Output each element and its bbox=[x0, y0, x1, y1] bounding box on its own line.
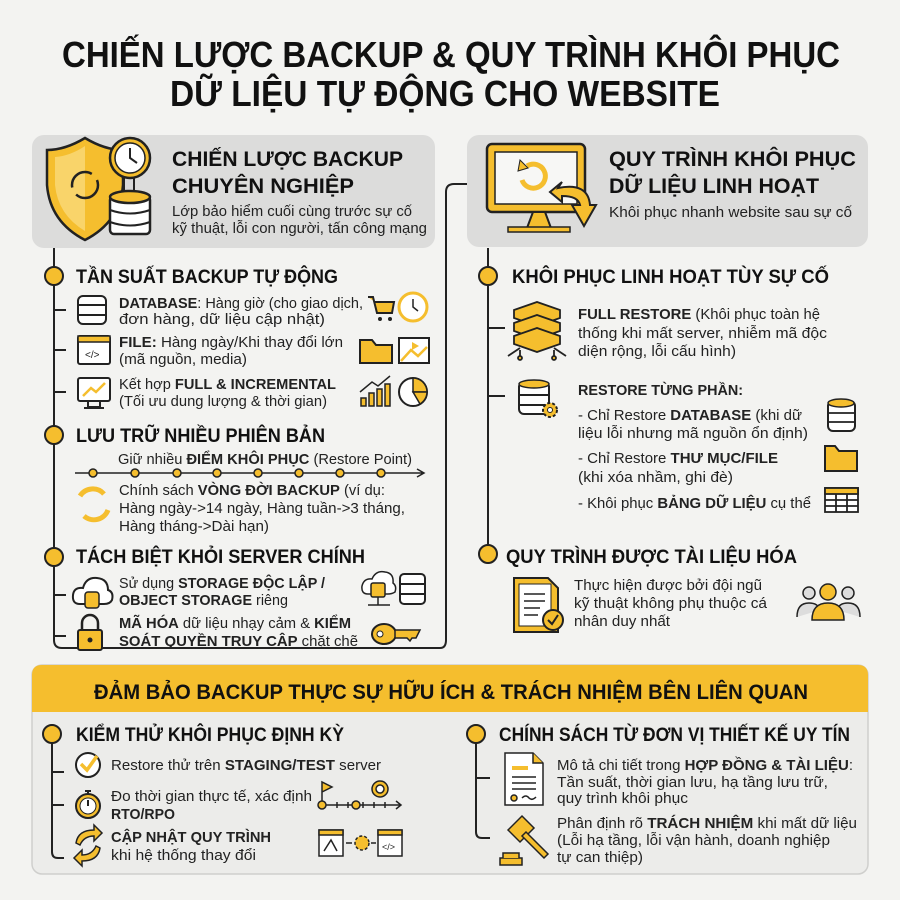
icon: bar chart bbox=[360, 376, 390, 406]
left column: kiểm thử: Restore thử trên STAGING/TEST server bbox=[111, 757, 381, 774]
icon: database bbox=[400, 574, 425, 604]
section: khôi phục linh hoạt: - Chỉ Restore DATABASE (khi dữ bbox=[578, 407, 802, 424]
left column: kiểm thử bbox=[43, 724, 402, 866]
right column: chính sách: Phân định rõ TRÁCH NHIỆM khi mất dữ liệu bbox=[557, 814, 857, 832]
section: tần suất backup: TẦN SUẤT BACKUP TỰ ĐỘNG bbox=[76, 266, 338, 288]
heading: chiến lược backup bbox=[172, 148, 403, 198]
section: tách biệt khỏi server bbox=[45, 546, 425, 650]
section: lưu trữ nhiều phiên bản: LƯU TRỮ NHIỀU PHIÊN BẢN bbox=[76, 425, 325, 447]
timeline: restore points bbox=[75, 469, 424, 477]
section: khôi phục linh hoạt: (khi xóa nhầm, ghi đè) bbox=[578, 469, 733, 486]
left column: kiểm thử: Đo thời gian thực tế, xác định bbox=[111, 788, 312, 805]
section: tách biệt khỏi server: TÁCH BIỆT KHỎI SERVER CHÍNH bbox=[76, 546, 365, 568]
title: DỮ LIỆU TỰ ĐỘNG CHO WEBSITE bbox=[170, 72, 720, 114]
section: lưu trữ nhiều phiên bản: Chính sách VÒNG ĐỜI BACKUP (ví dụ: bbox=[119, 481, 385, 499]
heading: quy trình khôi phục: QUY TRÌNH KHÔI PHỤC bbox=[609, 147, 856, 171]
section: tần suất backup: FILE: Hàng ngày/Khi thay đổi lớn bbox=[119, 334, 343, 351]
right column: chính sách bbox=[467, 724, 857, 866]
section: quy trình được tài liệu hóa: Thực hiện được bởi đội ngũ bbox=[574, 577, 762, 594]
left column: kiểm thử: CẬP NHẬT QUY TRÌNH bbox=[111, 828, 271, 846]
icon: gavel bbox=[500, 816, 548, 865]
icon: lifecycle arrows bbox=[80, 489, 108, 520]
left column: kiểm thử: khi hệ thống thay đổi bbox=[111, 847, 256, 864]
heading: quy trình khôi phục bbox=[609, 147, 856, 198]
icon: timeline flag target bbox=[318, 781, 401, 809]
icon: monitor restore bbox=[487, 144, 596, 232]
section: tần suất backup: (mã nguồn, media) bbox=[119, 351, 247, 368]
icon: process flow bbox=[319, 830, 402, 856]
section: lưu trữ nhiều phiên bản: Giữ nhiều ĐIỂM KHÔI PHỤC (Restore Point) bbox=[118, 450, 412, 468]
icon: database gear bbox=[519, 380, 557, 417]
right column: chính sách: Tần suất, thời gian lưu, hạ tầng lưu trữ, bbox=[557, 774, 828, 791]
right column: chính sách: tự can thiệp) bbox=[557, 849, 643, 866]
icon: folder bbox=[825, 446, 857, 471]
section: lưu trữ nhiều phiên bản: Hàng tháng->Dài hạn) bbox=[119, 518, 269, 535]
icon: database small bbox=[828, 399, 855, 431]
icon: cloud network bbox=[362, 572, 396, 605]
right column: chính sách: (Lỗi hạ tầng, lỗi vận hành, doanh nghiệp bbox=[557, 832, 830, 849]
icon: key bbox=[372, 624, 420, 644]
section: khôi phục linh hoạt: FULL RESTORE (Khôi phục toàn hệ bbox=[578, 306, 820, 323]
icon: database bbox=[78, 296, 106, 324]
right column: chính sách: CHÍNH SÁCH TỪ ĐƠN VỊ THIẾT KẾ UY TÍN bbox=[499, 724, 850, 746]
icon: clock bbox=[399, 293, 427, 321]
icon: document check bbox=[514, 578, 563, 632]
heading: quy trình khôi phục: DỮ LIỆU LINH HOẠT bbox=[609, 174, 819, 198]
section: khôi phục linh hoạt: - Khôi phục BẢNG DỮ LIỆU cụ thể bbox=[578, 494, 811, 512]
icon: update arrows bbox=[74, 825, 102, 866]
icon: code window: </> bbox=[85, 350, 100, 361]
subtitle: Khôi phục nhanh website sau sự cố bbox=[609, 204, 853, 221]
icon: code window bbox=[78, 336, 110, 364]
icon: lock bbox=[78, 615, 102, 650]
right column: chính sách: Mô tả chi tiết trong HỢP ĐỒNG & TÀI LIỆU: bbox=[557, 756, 853, 774]
section: quy trình được tài liệu hóa bbox=[479, 545, 860, 632]
left column: kiểm thử: RTO/RPO bbox=[111, 806, 175, 823]
icon: pie chart bbox=[399, 378, 427, 406]
section: quy trình được tài liệu hóa: nhân duy nhất bbox=[574, 613, 671, 630]
section: quy trình được tài liệu hóa: QUY TRÌNH ĐƯỢC TÀI LIỆU HÓA bbox=[506, 546, 797, 568]
section: khôi phục linh hoạt bbox=[479, 266, 858, 512]
connector arrow: left column to right column bbox=[54, 178, 476, 648]
section: khôi phục linh hoạt: KHÔI PHỤC LINH HOẠT TÙY SỰ CỐ bbox=[512, 266, 829, 288]
right timeline line bbox=[488, 248, 505, 554]
icon: cloud database bbox=[73, 578, 112, 608]
section: tách biệt khỏi server: SOÁT QUYỀN TRUY CẬP chặt chẽ bbox=[119, 632, 358, 650]
icon: cart bbox=[368, 297, 394, 321]
panel: left header bbox=[32, 135, 435, 248]
right column: chính sách: quy trình khôi phục bbox=[557, 790, 689, 807]
left column: kiểm thử: KIỂM THỬ KHÔI PHỤC ĐỊNH KỲ bbox=[76, 724, 344, 746]
icon: contract bbox=[505, 753, 543, 805]
icon: monitor chart bbox=[78, 378, 110, 408]
section: lưu trữ nhiều phiên bản bbox=[45, 425, 424, 535]
section: khôi phục linh hoạt: liệu lỗi nhưng mã nguồn ổn định) bbox=[578, 425, 808, 442]
section: tần suất backup bbox=[45, 266, 429, 410]
icon: shield with clock and database bbox=[47, 138, 150, 240]
banner bbox=[32, 665, 868, 712]
icon: folder bbox=[360, 340, 392, 363]
section: lưu trữ nhiều phiên bản: Hàng ngày->14 ngày, Hàng tuần->3 tháng, bbox=[119, 500, 405, 517]
section: tách biệt khỏi server: Sử dụng STORAGE ĐỘC LẬP / bbox=[119, 574, 326, 592]
title: CHIẾN LƯỢC BACKUP & QUY TRÌNH KHÔI PHỤC bbox=[62, 33, 840, 75]
section: tách biệt khỏi server: OBJECT STORAGE riêng bbox=[119, 592, 288, 609]
subtitle bbox=[172, 203, 427, 237]
icon: table bbox=[825, 488, 858, 512]
heading: chiến lược backup: CHUYÊN NGHIỆP bbox=[172, 174, 354, 198]
section: khôi phục linh hoạt: thống khi mất server, nhiễm mã độc bbox=[578, 325, 828, 342]
section: tần suất backup: (Tối ưu dung lượng & thời gian) bbox=[119, 393, 327, 410]
banner: ĐẢM BẢO BACKUP THỰC SỰ HỮU ÍCH & TRÁCH NHIỆM BÊN LIÊN QUAN bbox=[94, 680, 808, 704]
icon: check circle bbox=[76, 753, 100, 777]
icon: stopwatch bbox=[76, 791, 100, 818]
section: khôi phục linh hoạt: - Chỉ Restore THƯ MỤC/FILE bbox=[578, 450, 778, 467]
icon: server stack bbox=[508, 302, 566, 360]
icon: image bbox=[399, 338, 429, 363]
icon: process flow: </> bbox=[382, 842, 395, 852]
section: tần suất backup: DATABASE: Hàng giờ (cho giao dịch, bbox=[119, 295, 363, 312]
section: tần suất backup: Kết hợp FULL & INCREMENTAL bbox=[119, 376, 336, 393]
panel: bottom bbox=[32, 665, 868, 874]
subtitle: kỹ thuật, lỗi con người, tấn công mạng bbox=[172, 220, 427, 237]
icon: team bbox=[797, 584, 860, 620]
heading: chiến lược backup: CHIẾN LƯỢC BACKUP bbox=[172, 148, 403, 171]
title bbox=[62, 33, 840, 114]
section: khôi phục linh hoạt: RESTORE TỪNG PHẦN: bbox=[578, 381, 743, 399]
section: khôi phục linh hoạt: diện rộng, lỗi cấu hình) bbox=[578, 343, 736, 360]
subtitle: Lớp bảo hiểm cuối cùng trước sự cố bbox=[172, 203, 413, 220]
section: tần suất backup: đơn hàng, dữ liệu cập nhật) bbox=[119, 311, 325, 328]
panel: right header bbox=[467, 135, 868, 247]
section: quy trình được tài liệu hóa: kỹ thuật không phụ thuộc cá bbox=[574, 595, 768, 612]
section: tách biệt khỏi server: MÃ HÓA dữ liệu nhạy cảm & KIỂM bbox=[119, 614, 351, 632]
